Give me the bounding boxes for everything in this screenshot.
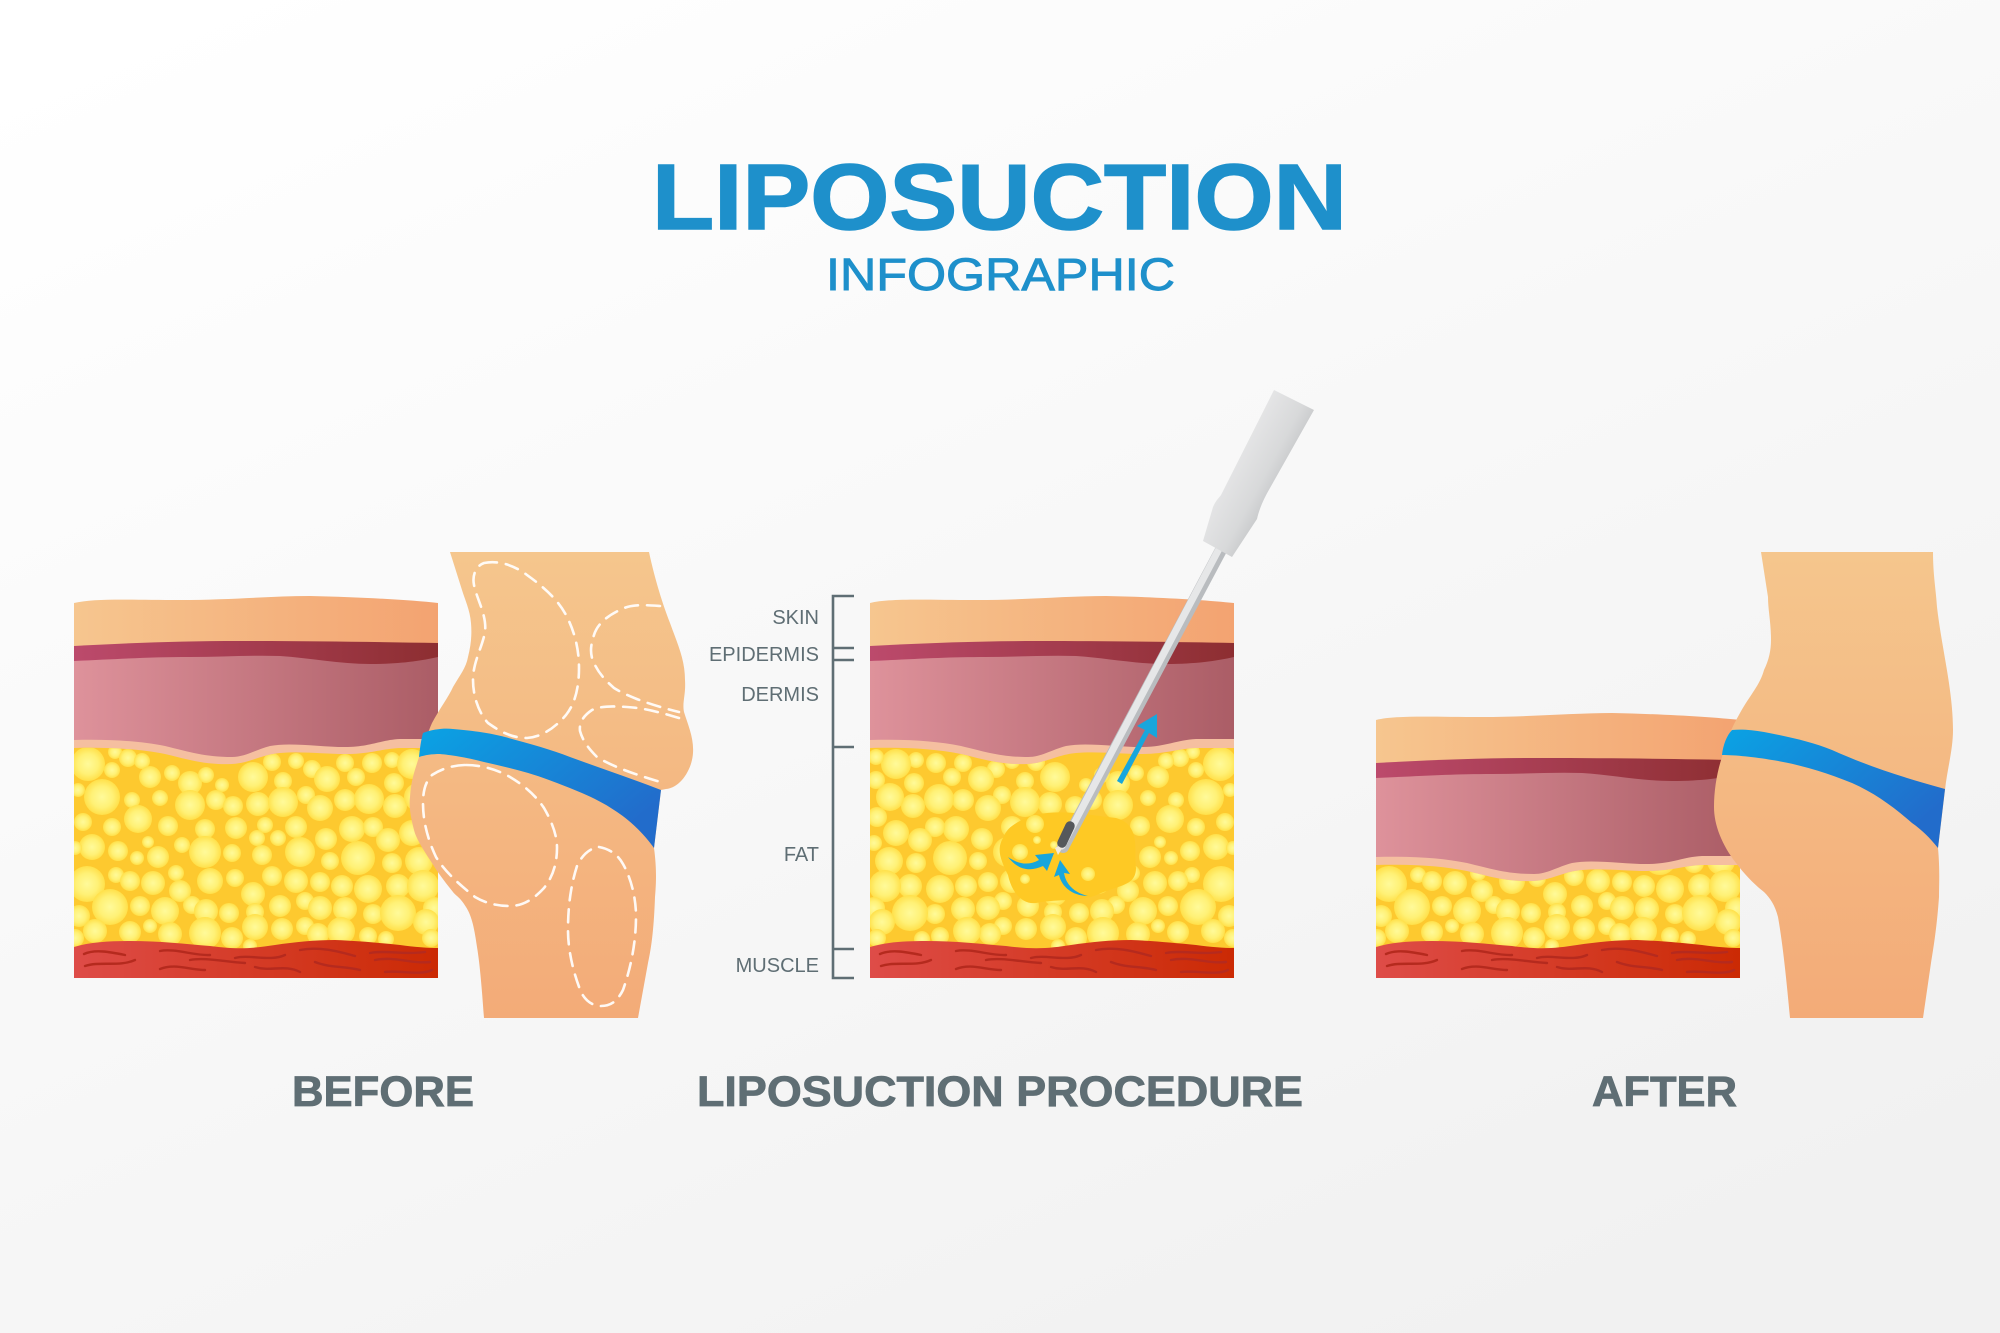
panel: liposuction procedure	[709, 390, 1314, 978]
layer labels: MUSCLE	[736, 955, 819, 977]
suction arrow: fat extraction path	[1117, 714, 1157, 784]
title: LIPOSUCTION	[652, 145, 1347, 249]
cannula handle	[1203, 390, 1314, 557]
skin cross-section: before	[66, 596, 445, 978]
layer bracket	[833, 596, 854, 978]
cannula shaft	[1063, 548, 1222, 847]
cannula instrument	[1055, 390, 1314, 855]
caption: before: BEFORE	[292, 1068, 474, 1116]
layer labels: FAT	[784, 844, 819, 866]
suction arrow: bottom	[1054, 860, 1088, 896]
layer labels: SKIN	[772, 607, 819, 629]
panel: before	[66, 552, 693, 1018]
caption: liposuction procedure: LIPOSUCTION PROCEDURE	[697, 1068, 1303, 1116]
layer labels: DERMIS	[741, 684, 819, 706]
layer labels: EPIDERMIS	[709, 644, 819, 666]
skin cross-section: procedure	[863, 596, 1242, 978]
bikini strap: after	[1722, 730, 1945, 848]
suction arrow: left	[1008, 853, 1054, 871]
bikini strap: before	[419, 729, 661, 848]
dashed treatment zones	[423, 562, 679, 1006]
skin cross-section: after	[1376, 713, 1740, 978]
panel: after	[1376, 552, 1953, 1018]
body silhouette: after	[1714, 552, 1953, 1018]
caption: after: AFTER	[1592, 1068, 1737, 1116]
title	[652, 145, 1347, 300]
body silhouette: before	[410, 552, 693, 1018]
cannula tip	[1055, 842, 1066, 855]
subtitle: INFOGRAPHIC	[826, 249, 1175, 300]
layer labels	[709, 607, 819, 977]
fat cleared area	[1000, 812, 1136, 903]
infographic canvas	[74, 163, 1953, 1107]
